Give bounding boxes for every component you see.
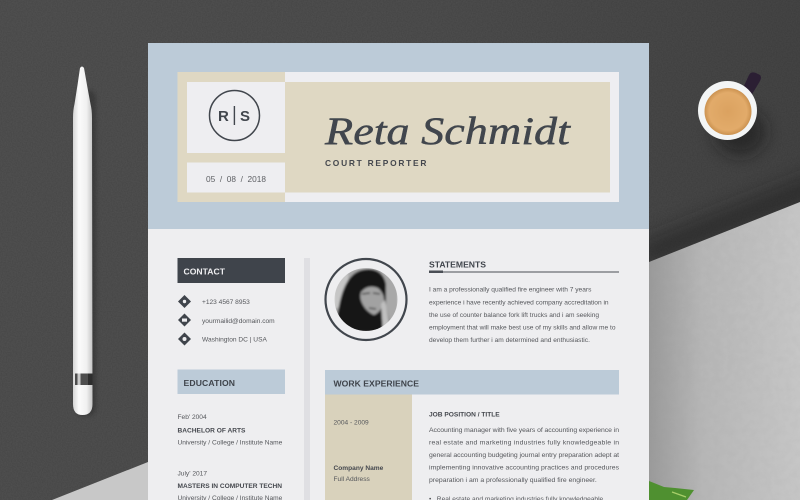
icon: plant leaf <box>649 481 694 500</box>
statement text: I am a professionally qualified fire engineer with 7 years <box>429 286 592 294</box>
monogram logo: R <box>218 108 229 125</box>
job description: Accounting manager with five years of accounting experience in <box>429 427 619 434</box>
contact heading: CONTACT <box>184 266 226 276</box>
phone number: +123 4567 8953 <box>202 299 250 306</box>
education entry 2 <box>178 470 283 500</box>
date box: 05 / 08 / 2018 <box>206 174 266 184</box>
job description <box>429 412 620 500</box>
contact list <box>178 295 275 346</box>
statement text: the use of counter balance fork lift trucks and i am seeking <box>429 312 599 319</box>
work sidebar: Company Name <box>334 465 384 472</box>
concrete surface <box>52 172 800 500</box>
job description: general accounting budgeting journal entry preparation adept at <box>429 452 619 459</box>
job description: implementing innovative accounting practices and procedures <box>429 464 620 472</box>
statement text: experience i have recently achieved company accreditation in <box>429 300 609 306</box>
job description: JOB POSITION / TITLE <box>429 412 500 418</box>
job description: preparation i am a professionally qualified fire engineer. <box>429 477 597 484</box>
work sidebar: 2004 - 2009 <box>334 420 369 426</box>
icon: location <box>178 332 191 346</box>
job description: real estate and marketing industries fully knowledgeable in <box>429 440 619 446</box>
education entry 1: Feb' 2004 <box>178 414 207 421</box>
icon: mail <box>178 314 191 326</box>
work sidebar: Full Address <box>334 476 370 483</box>
statements heading: STATEMENTS <box>429 260 486 270</box>
education heading <box>178 370 285 394</box>
column divider <box>304 258 310 500</box>
job title: COURT REPORTER <box>325 158 428 168</box>
resume page <box>148 43 649 500</box>
profile photo <box>326 259 406 340</box>
monogram logo: S <box>240 108 250 125</box>
education entry 1: University / College / Institute Name <box>178 440 283 446</box>
icon: coffee cup <box>698 72 766 156</box>
work sidebar <box>325 394 412 500</box>
education entry 2: MASTERS IN COMPUTER TECHN <box>178 483 282 490</box>
icon: pencil <box>73 66 96 416</box>
education entry 1: BACHELOR OF ARTS <box>178 428 246 434</box>
date box <box>187 162 285 192</box>
education entry 2: July' 2017 <box>178 470 207 478</box>
statement text: employment that will make best use of my skills and allow me to <box>429 324 616 332</box>
statement text: develop them further i am determined and enthusiastic. <box>429 337 590 344</box>
statement text <box>429 286 616 344</box>
header band <box>148 43 649 229</box>
work experience heading: WORK EXPERIENCE <box>334 378 419 388</box>
work experience heading <box>325 370 619 394</box>
email: yourmailid@domain.com <box>202 318 275 325</box>
education heading: EDUCATION <box>184 378 235 388</box>
icon: phone <box>178 295 191 308</box>
heading rule <box>429 270 619 273</box>
contact heading <box>178 258 285 283</box>
address: Washington DC | USA <box>202 336 267 344</box>
name: Reta Schmidt <box>324 110 571 153</box>
education entry 1 <box>178 414 283 446</box>
monogram logo <box>187 82 285 153</box>
statements section <box>429 260 619 344</box>
